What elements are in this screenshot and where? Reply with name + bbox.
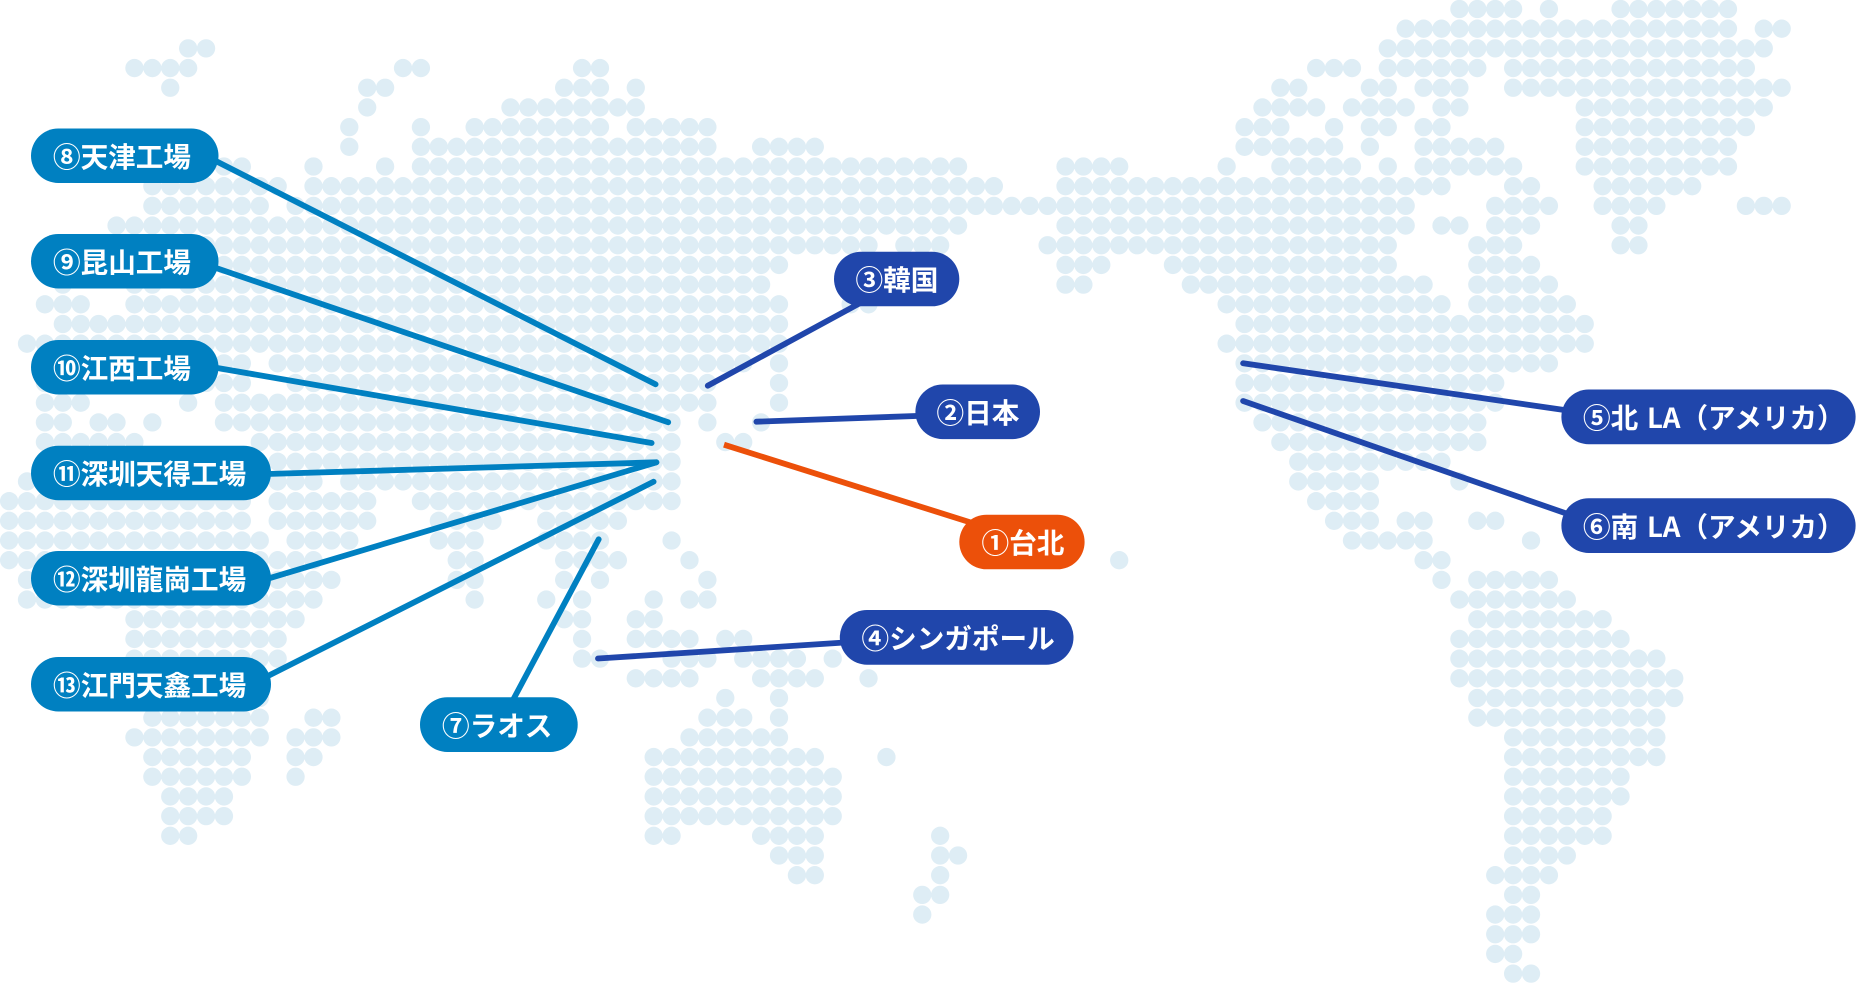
label 13: ⑬江門天鑫工場	[53, 664, 246, 704]
location: 8 Tianjin factory	[31, 128, 656, 384]
location: 13 Jiangmen Tianxin factory	[31, 482, 654, 712]
pill 13	[31, 657, 271, 712]
location: 5 North LA	[1243, 363, 1856, 444]
leader line 11	[250, 462, 656, 474]
leader line 5	[1243, 363, 1585, 413]
leader line 9	[200, 262, 668, 422]
pill 11	[31, 446, 271, 500]
location: 9 Kunshan factory	[31, 234, 668, 422]
pill 7	[420, 697, 578, 752]
leader line 1	[724, 445, 985, 527]
leader line 3	[708, 295, 875, 386]
leader line 8	[200, 153, 656, 384]
pill 6	[1561, 498, 1856, 553]
pill 1	[959, 515, 1085, 569]
location: 11 Shenzhen Tiande factory	[31, 446, 656, 500]
label 1: ①台北	[982, 521, 1065, 561]
label 4: ④シンガポール	[862, 616, 1055, 656]
pill 10	[31, 340, 218, 394]
label 8: ⑧天津工場	[53, 135, 191, 175]
label 10: ⑩江西工場	[53, 346, 191, 386]
leader line 13	[250, 482, 654, 685]
leader line 7	[505, 539, 599, 715]
leader line 10	[200, 365, 652, 443]
location: 6 South LA	[1243, 401, 1856, 553]
pill 12	[31, 551, 271, 606]
pill 9	[31, 234, 218, 288]
label 2: ②日本	[936, 391, 1020, 431]
location: 12 Shenzhen Longgang factory	[31, 462, 656, 606]
pill 5	[1561, 390, 1856, 444]
location: 1 Taipei	[724, 445, 1085, 569]
location: 10 Jiangxi factory	[31, 340, 652, 443]
pill 4	[840, 610, 1074, 665]
location: 7 Laos	[420, 539, 599, 752]
leader line 2	[756, 416, 930, 422]
label 5: ⑤北 LA（アメリカ）	[1583, 396, 1845, 436]
pill 2	[915, 384, 1040, 439]
label 7: ⑦ラオス	[442, 704, 552, 744]
label 12: ⑫深圳龍崗工場	[53, 558, 246, 598]
pill 8	[31, 128, 218, 183]
leader line 12	[250, 462, 656, 584]
location: 3 Korea	[708, 252, 959, 386]
label 6: ⑥南 LA（アメリカ）	[1583, 505, 1845, 545]
label 11: ⑪深圳天得工場	[53, 452, 246, 492]
leader line 6	[1243, 401, 1585, 520]
pill 3	[834, 252, 959, 306]
leader line 4	[598, 642, 860, 658]
location: 2 Japan	[756, 384, 1040, 439]
location: 4 Singapore	[598, 610, 1074, 665]
label 3: ③韓国	[856, 258, 938, 298]
label 9: ⑨昆山工場	[53, 240, 191, 280]
